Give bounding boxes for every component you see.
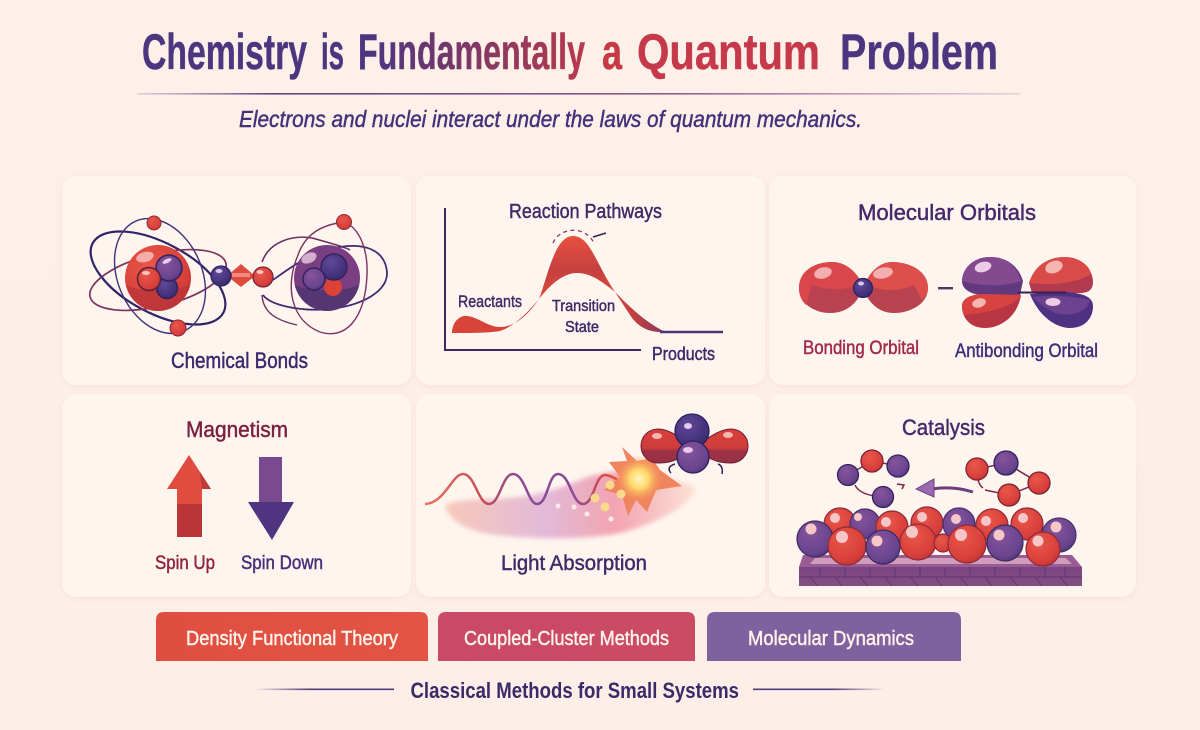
footer: classical methods: Classical Methods for Small Systems: [410, 678, 739, 703]
icon: left atom: [76, 204, 240, 348]
title: Problem: [840, 24, 998, 80]
icon: burst: [556, 447, 682, 522]
label: transition state: State: [565, 319, 599, 336]
panel: magnetism: [62, 394, 411, 599]
icon: right atom: [262, 214, 387, 334]
method tag: molecular dynamics: Molecular Dynamics: [748, 628, 914, 650]
title: is: [321, 24, 344, 80]
icon: spin up arrow: [167, 455, 211, 537]
heading: reaction pathways: Reaction Pathways: [509, 201, 662, 223]
label: spin up: Spin Up: [155, 553, 215, 574]
icon: spin down arrow: [248, 457, 294, 540]
chart: energy curve: [452, 236, 723, 333]
icon: molecule before surface: [838, 450, 909, 508]
title: Quantum: [637, 24, 820, 80]
title: [142, 24, 998, 80]
method tag: molecular dynamics: [707, 612, 961, 661]
method tag: density functional theory: Density Functional Theory: [186, 628, 398, 650]
panel: molecular orbitals: [769, 176, 1136, 387]
title: Chemistry: [142, 24, 307, 80]
heading: catalysis: Catalysis: [902, 415, 985, 440]
label: products: Products: [652, 344, 715, 364]
label: reactants: Reactants: [458, 292, 522, 311]
transition state marker: [553, 230, 606, 243]
icon: catalyst surface slab: [799, 555, 1082, 586]
label: spin down: Spin Down: [241, 553, 323, 574]
label: transition state: Transition: [552, 298, 615, 315]
label: antibonding orbital: Antibonding Orbital: [955, 341, 1098, 362]
icon: bonding orbital: [799, 262, 928, 313]
title: a: [602, 24, 623, 80]
panel: chemical bonds: [62, 176, 411, 387]
icon: surface atoms: [797, 507, 1076, 566]
icon: bond between atoms: [211, 264, 273, 287]
minus sign: [938, 287, 953, 289]
title: Fundamentally: [358, 24, 585, 80]
subtitle: Electrons and nuclei interact under the laws of quantum mechanics.: [239, 106, 862, 132]
panel: light absorption: [416, 394, 765, 599]
icon: antibonding orbital: [962, 257, 1093, 328]
panel: reaction pathways: [416, 176, 765, 387]
icon: light wave: [425, 474, 618, 504]
method tag: coupled-cluster methods: Coupled-Cluster Methods: [464, 628, 669, 650]
method tag: density functional theory: [156, 612, 428, 661]
heading: molecular orbitals: Molecular Orbitals: [858, 200, 1036, 225]
panel: catalysis: [769, 394, 1136, 599]
arrow: reaction direction: [916, 479, 973, 497]
label: light absorption: Light Absorption: [501, 552, 647, 575]
label: chemical bonds: Chemical Bonds: [171, 348, 308, 373]
chart axes: [445, 208, 641, 350]
smear of absorbed light: [445, 470, 697, 538]
heading: magnetism: Magnetism: [186, 417, 288, 442]
method tag: coupled-cluster methods: [438, 612, 695, 661]
label: transition state: [552, 298, 615, 336]
label: bonding orbital: Bonding Orbital: [803, 338, 919, 359]
icon: molecule after surface: [966, 451, 1050, 506]
icon: molecule: [641, 414, 748, 474]
